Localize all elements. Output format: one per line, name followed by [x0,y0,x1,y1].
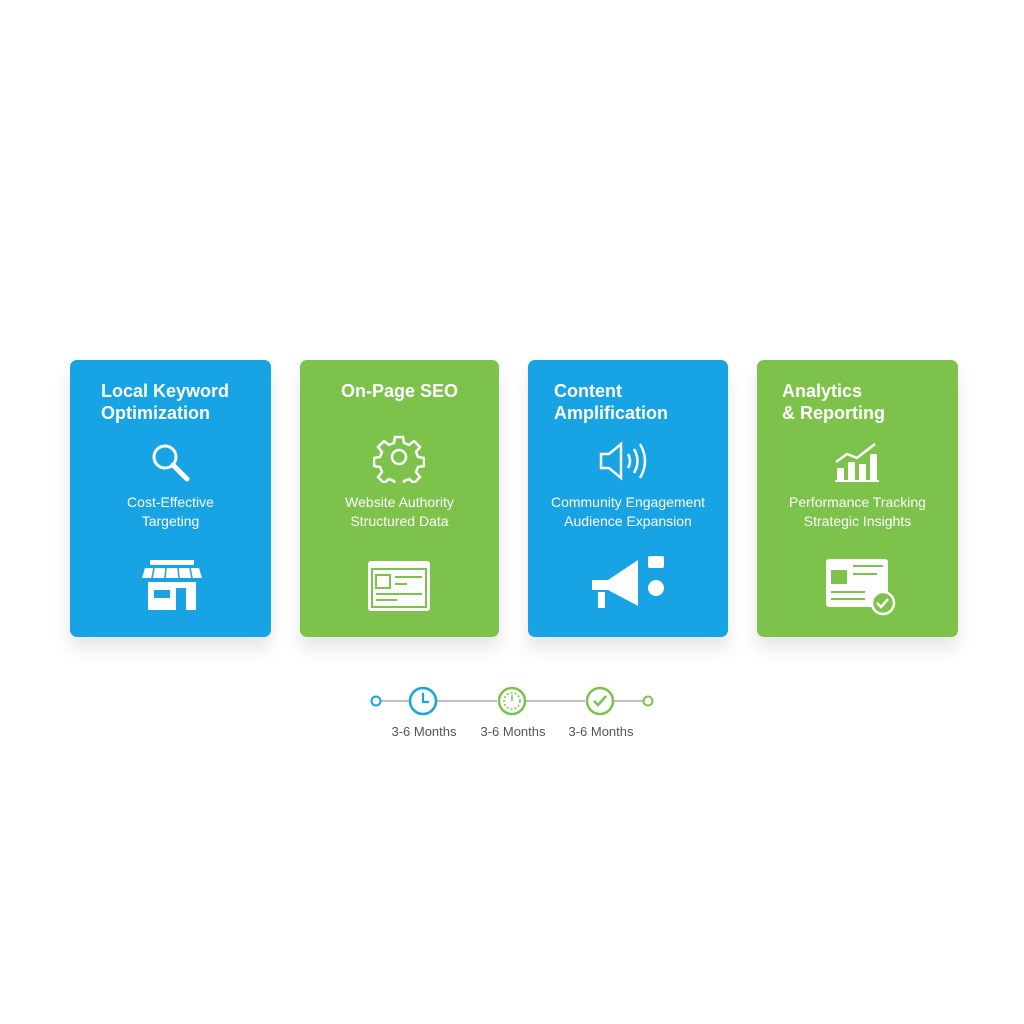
card: content amplification [528,360,728,637]
text: Website Authority [345,494,454,510]
label 2: 3-6 Months [480,724,546,739]
icon: magnifier [152,444,190,482]
title [554,381,668,423]
text: Community Engagement [551,494,705,510]
text [345,494,454,529]
text [789,494,926,529]
icon: store [142,560,202,610]
text [127,494,214,529]
label 1: 3-6 Months [391,724,457,739]
title [782,381,885,423]
title: Analytics [782,381,862,401]
card: local keyword [70,360,271,637]
icon: megaphone [592,556,664,608]
text: Structured Data [350,513,449,529]
icon: gear [373,436,425,483]
text [551,494,705,529]
title: On-Page SEO [341,381,458,401]
title: Content [554,381,622,401]
title: Amplification [554,403,668,423]
title: Local Keyword [101,381,229,401]
text: Performance Tracking [789,494,926,510]
text: Strategic Insights [804,513,911,529]
icon: report [826,559,896,616]
title: Optimization [101,403,210,423]
text: Targeting [142,513,199,529]
card: on-page seo [300,360,499,637]
icon: browser [368,561,430,611]
label 3: 3-6 Months [568,724,634,739]
card: analytics [757,360,958,637]
timeline [370,686,654,716]
icon: speaker [600,442,646,481]
text: Audience Expansion [564,513,692,529]
title [101,381,229,423]
text: Cost-Effective [127,494,214,510]
title: & Reporting [782,403,885,423]
icon: bar chart [835,443,879,482]
